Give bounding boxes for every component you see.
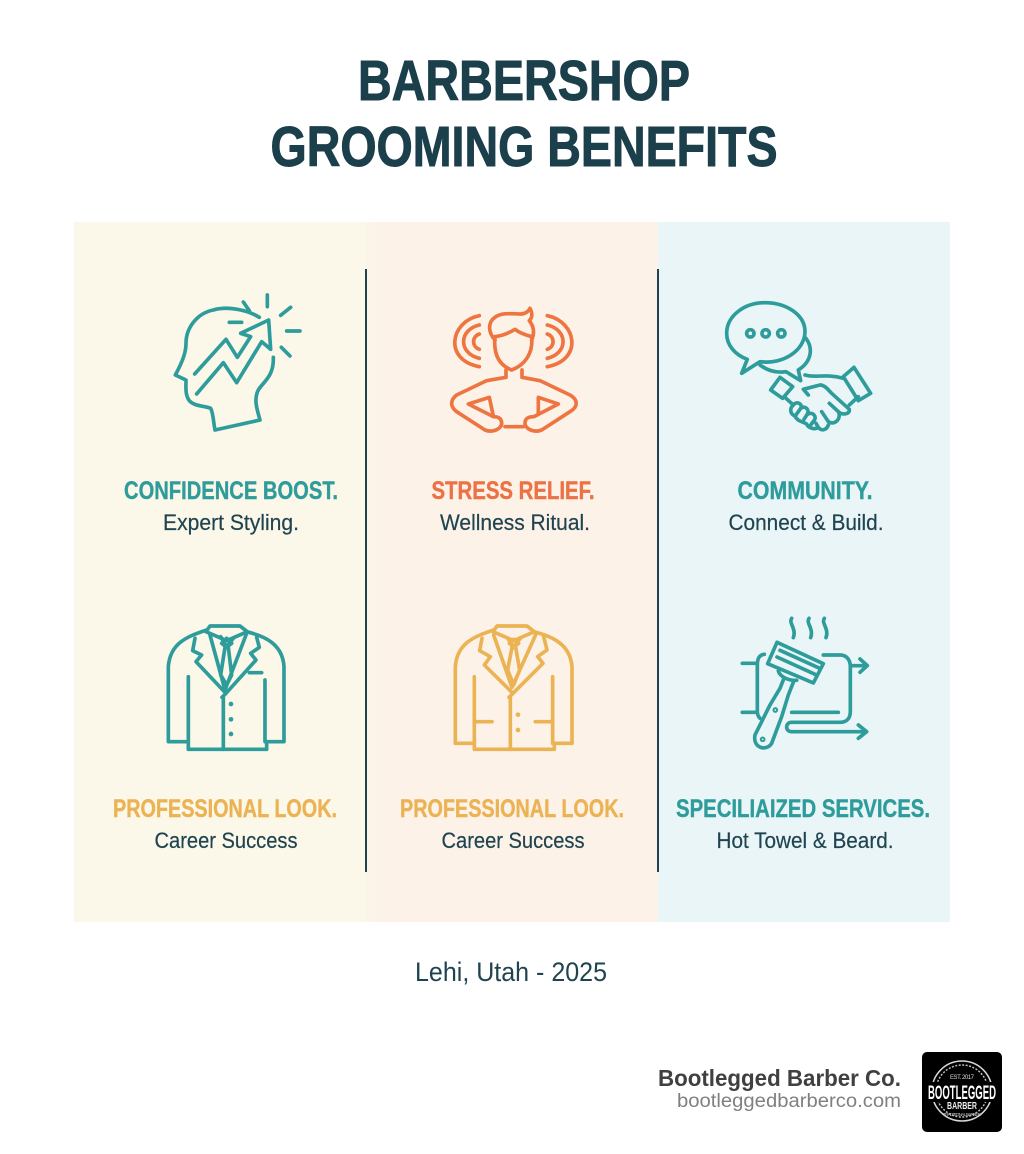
brand name: Bootlegged Barber Co. [658,1065,901,1091]
icon: yellow suit [455,626,572,749]
text: stress relief: STRESS RELIEF. [432,477,594,505]
text: professional look yellow left: Career Success [154,828,298,853]
text: specialized services: Hot Towel & Beard. [716,828,894,853]
text: community: COMMUNITY. [738,477,872,505]
panel: three colored columns [74,222,950,922]
text: professional look yellow middle [400,795,624,853]
text: professional look yellow left [113,795,337,853]
text: confidence boost: CONFIDENCE BOOST. [124,477,338,505]
logo badge: BARBER [947,1101,978,1112]
brand website: bootleggedbarberco.com [677,1091,901,1112]
text: stress relief [432,477,594,535]
text: stress relief: Wellness Ritual. [440,510,590,535]
text: professional look yellow middle: Career Success [442,828,584,853]
icon: relaxed person [452,308,576,431]
logo badge: TRADITIONAL BARBER [943,1112,982,1117]
text: confidence boost: Expert Styling. [163,510,299,535]
logo badge [922,1052,1002,1132]
text: confidence boost [124,477,338,535]
text: location and year: Lehi, Utah - 2025 [415,957,607,987]
text: community: Connect & Build. [728,510,884,535]
title: BARBERSHOP [358,49,690,113]
icon: razor, hot towel and arrows [742,618,867,748]
icon: teal suit [168,626,284,749]
logo badge: EST. 2017 [950,1075,975,1081]
text: specialized services [676,795,930,853]
icon: speech bubbles and handshake [727,303,871,430]
text: professional look yellow left: PROFESSIONAL LOOK. [113,795,337,823]
title [270,49,778,179]
text: specialized services: SPECILIAIZED SERVICES. [676,795,930,823]
text: community [728,477,884,535]
title: GROOMING BENEFITS [270,115,778,179]
icon: head with rising arrow [175,295,300,430]
text: professional look yellow middle: PROFESSIONAL LOOK. [400,795,624,823]
